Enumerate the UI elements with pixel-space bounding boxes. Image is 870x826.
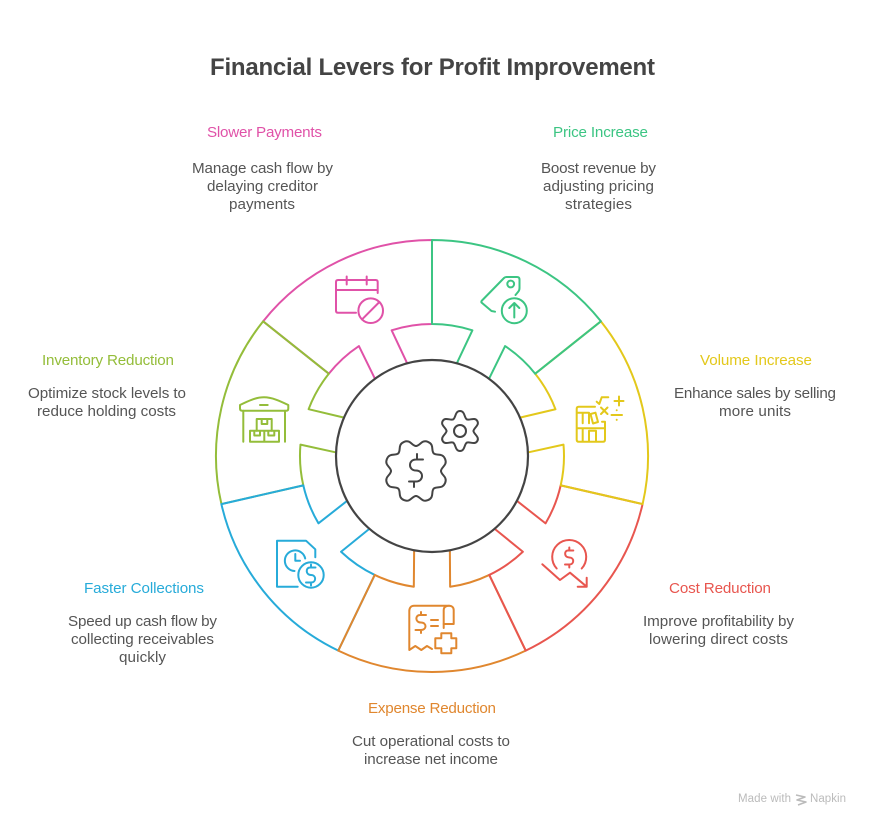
text block: cost reduction: [643, 580, 794, 648]
heading: Faster Collections: [84, 580, 204, 597]
watermark: made with napkin: Napkin: [810, 793, 846, 805]
text block: price increase: [541, 124, 656, 213]
title: Financial Levers for Profit Improvement: [210, 54, 655, 81]
heading: Inventory Reduction: [42, 352, 174, 369]
description: Manage cash flow by: [192, 160, 333, 177]
icon: expense receipt: [409, 606, 456, 653]
heading: Slower Payments: [207, 124, 322, 141]
description: [28, 385, 186, 420]
heading: Cost Reduction: [669, 580, 771, 597]
description: reduce holding costs: [37, 403, 176, 420]
description: quickly: [119, 649, 166, 666]
description: increase net income: [364, 751, 498, 768]
text block: faster collections: [68, 580, 217, 666]
segment: inventory reduction: [184, 309, 357, 504]
small gear: [439, 411, 481, 451]
icon: goods and math: [577, 396, 624, 442]
description: lowering direct costs: [649, 631, 788, 648]
heading: Volume Increase: [700, 352, 812, 369]
segment: volume increase: [492, 321, 706, 540]
icon: cost falling: [542, 540, 587, 587]
text block: inventory reduction: [28, 352, 186, 420]
description: Boost revenue by: [541, 160, 656, 177]
description: more units: [719, 403, 791, 420]
description: Speed up cash flow by: [68, 613, 217, 630]
description: delaying creditor: [207, 178, 318, 195]
heading: Expense Reduction: [368, 700, 496, 717]
text block: volume increase: [674, 352, 836, 420]
description: Cut operational costs to: [352, 733, 510, 750]
description: Enhance sales by selling: [674, 385, 836, 402]
description: payments: [229, 196, 295, 213]
description: [68, 613, 217, 666]
description: strategies: [565, 196, 632, 213]
icon: document clock dollar: [277, 541, 324, 588]
radial ring diagram: [184, 189, 706, 724]
icon: warehouse boxes: [240, 397, 288, 442]
center circle: [336, 360, 528, 552]
watermark: made with napkin: Made with: [738, 793, 791, 805]
description: [674, 385, 836, 420]
icon: gears with dollar: [383, 411, 481, 504]
heading: Price Increase: [553, 124, 648, 141]
text block: slower payments: [192, 124, 333, 213]
description: [541, 160, 656, 213]
description: Improve profitability by: [643, 613, 794, 630]
segment: expense reduction: [313, 526, 526, 724]
icon: price tag up: [481, 277, 527, 323]
icon: calendar blocked: [336, 276, 383, 323]
large gear: [383, 438, 449, 504]
watermark: made with napkin: [738, 793, 846, 805]
description: adjusting pricing: [543, 178, 654, 195]
text block: expense reduction: [352, 700, 510, 768]
description: [192, 160, 333, 213]
description: [643, 613, 794, 648]
segment: faster collections: [186, 452, 399, 651]
segment: slower payments: [263, 189, 477, 408]
segment: price increase: [432, 240, 601, 379]
description: [352, 733, 510, 768]
segment: cost reduction: [470, 473, 643, 669]
description: collecting receivables: [71, 631, 214, 648]
description: Optimize stock levels to: [28, 385, 186, 402]
